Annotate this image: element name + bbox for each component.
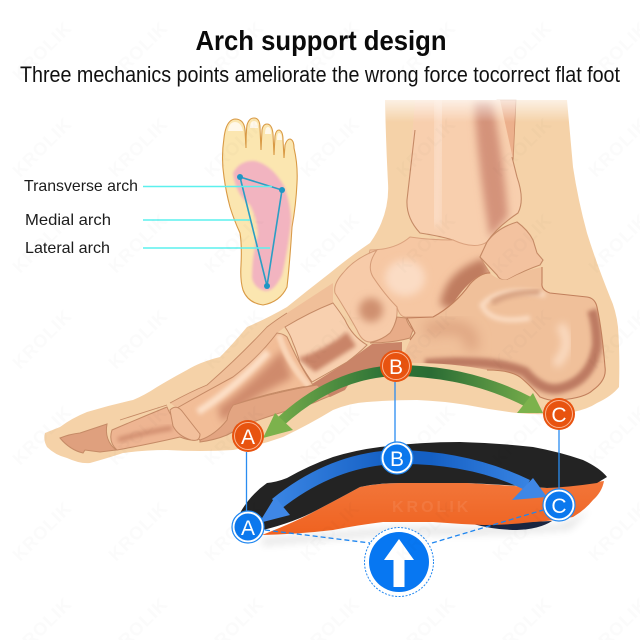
orange marker A [232, 420, 264, 452]
proximal phalanx bone [111, 405, 197, 450]
upper strip outline [170, 313, 287, 403]
blue marker A [232, 511, 264, 543]
label: transverse arch: Transverse arch [24, 178, 138, 195]
leg top fade [375, 90, 585, 122]
tibia bone [407, 100, 521, 247]
navicular bone [335, 250, 397, 342]
blue marker B [381, 442, 413, 474]
orange marker A: A [241, 426, 255, 449]
calcaneus heel bone [400, 267, 605, 401]
blue support arrow [259, 450, 547, 523]
title: Arch support design [196, 25, 446, 56]
dashed lines to central arrow [265, 510, 543, 543]
midfoot arch shadow [312, 342, 402, 397]
distal phalanx bone [60, 424, 116, 453]
foot skin silhouette [44, 100, 619, 463]
connecting blue lines [246, 382, 559, 515]
toe nails [228, 121, 282, 140]
talus bone [369, 237, 490, 317]
icon: upward arrow badge [364, 528, 434, 596]
orange marker C: C [551, 404, 567, 427]
arch triangle [237, 174, 285, 289]
watermark on insole: KROLIK [392, 499, 471, 516]
toe joint knob [170, 407, 200, 440]
fibula malleolus bone [480, 222, 543, 280]
label: medial arch: Medial arch [25, 212, 111, 229]
label: lateral arch: Lateral arch [25, 240, 110, 257]
sole silhouette [222, 118, 297, 305]
orange marker C [543, 398, 575, 430]
blue marker C [543, 489, 575, 521]
upper metatarsal strip [170, 283, 333, 408]
insole orange base [262, 481, 604, 535]
pink pressure area [233, 161, 291, 291]
arch labels and leader lines [24, 178, 272, 257]
insole ground shadow [262, 510, 590, 546]
cuboid bone [370, 317, 413, 343]
heel underside [473, 521, 552, 530]
blue marker B: B [390, 448, 404, 471]
metatarsal bone [177, 333, 313, 440]
orange marker B [380, 350, 412, 382]
lower metatarsal strip [200, 385, 330, 442]
green force arrow [263, 365, 543, 438]
fibula bone [497, 100, 516, 163]
cuneiform bone [285, 303, 367, 382]
insole [240, 442, 607, 546]
small foot sole diagram [222, 118, 297, 305]
orange marker B: B [389, 356, 403, 379]
insole black top fabric [240, 442, 607, 535]
blue marker C: C [551, 495, 567, 518]
blue marker A: A [241, 517, 255, 540]
foot anatomy illustration [44, 90, 619, 463]
